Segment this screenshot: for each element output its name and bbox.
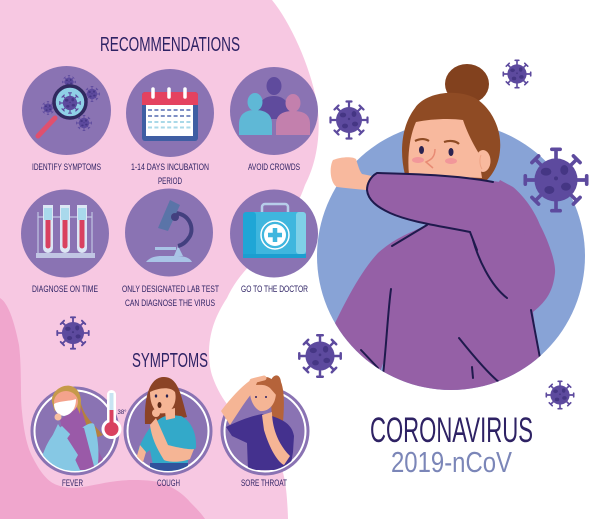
- symptom: fever: [32, 386, 127, 475]
- icon: calendar: [126, 69, 214, 157]
- body: [325, 180, 555, 400]
- panel: big blue circle: [317, 122, 585, 390]
- icon: microscope: [125, 188, 213, 276]
- symptom: sore throat: [221, 375, 308, 474]
- icon: test tubes: [21, 190, 109, 278]
- arm: [367, 173, 525, 235]
- symptom: cough: [125, 377, 211, 474]
- label: diagnose on time: DIAGNOSE ON TIME: [32, 284, 98, 295]
- icon: avoid crowds: [230, 67, 318, 155]
- heading: recommendations: RECOMMENDATIONS: [100, 34, 240, 56]
- icon: first aid kit: [230, 190, 318, 278]
- icons: viruses around the figure: [299, 60, 587, 409]
- label: go to the doctor: GO TO THE DOCTOR: [241, 284, 308, 295]
- label: lab test: ONLY DESIGNATED LAB TEST: [122, 284, 219, 295]
- ear: [476, 150, 490, 172]
- label: avoid crowds: AVOID CROWDS: [248, 162, 300, 173]
- fist: [331, 157, 372, 190]
- figure: woman coughing into elbow: [325, 64, 555, 400]
- icon: identify symptoms: [22, 66, 111, 155]
- face: [408, 119, 482, 178]
- icon: virus left: [57, 317, 89, 349]
- bun: [445, 64, 489, 104]
- eyes and features: [412, 139, 459, 168]
- label: incubation period: PERIOD: [158, 176, 182, 187]
- label: lab test: CAN DIAGNOSE THE VIRUS: [125, 298, 215, 309]
- hair: [402, 93, 500, 180]
- label: incubation period: 1-14 DAYS INCUBATION: [131, 162, 209, 173]
- background: dark pink shape: [0, 298, 205, 519]
- label: lab test: [122, 284, 219, 309]
- label: cough: COUGH: [157, 478, 180, 489]
- label: fever: FEVER: [62, 478, 83, 489]
- label: incubation period: [131, 162, 209, 187]
- label: sore throat: SORE THROAT: [241, 478, 287, 489]
- label: identify symptoms: IDENTIFY SYMPTOMS: [32, 162, 101, 173]
- heading: symptoms: SYMPTOMS: [132, 350, 208, 372]
- background: light pink shape: [0, 0, 319, 519]
- subtitle: 2019-nCoV: 2019-nCoV: [391, 447, 513, 479]
- thermometer: 38°: [118, 410, 127, 416]
